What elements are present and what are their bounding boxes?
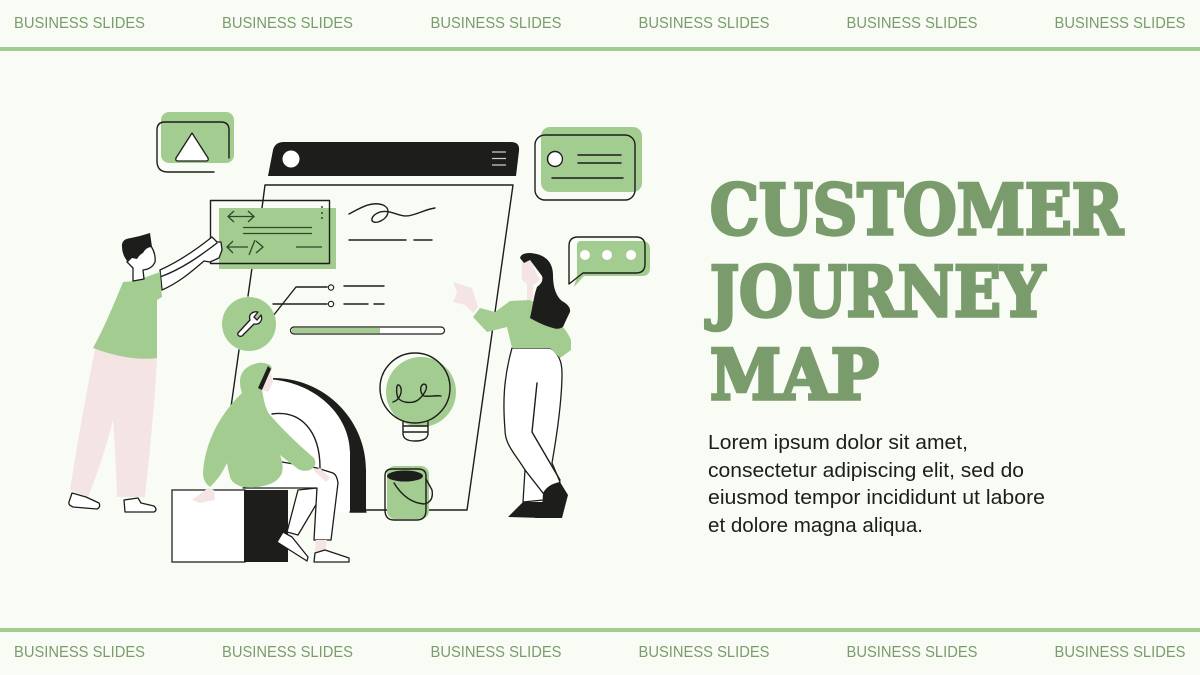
top header band: BUSINESS SLIDES bbox=[846, 15, 978, 32]
top header band: BUSINESS SLIDES bbox=[14, 15, 145, 32]
bottom footer band bbox=[0, 628, 1200, 661]
bottom footer band: BUSINESS SLIDES bbox=[1054, 644, 1186, 661]
character: pointing woman bbox=[453, 253, 571, 518]
icon: triangle card bbox=[157, 112, 234, 172]
title: JOURNEY bbox=[705, 252, 1046, 333]
bottom footer band: BUSINESS SLIDES bbox=[222, 644, 353, 661]
icon: light bulb bbox=[380, 353, 456, 441]
body text: et dolore magna aliqua. bbox=[708, 514, 923, 537]
top header band: BUSINESS SLIDES bbox=[430, 15, 562, 32]
bottom footer band: BUSINESS SLIDES bbox=[846, 644, 978, 661]
browser window panel bbox=[231, 142, 519, 510]
body text: Lorem ipsum dolor sit amet, bbox=[708, 431, 968, 454]
character: man with raised arms bbox=[69, 233, 222, 512]
icon: bucket bbox=[385, 466, 432, 520]
title: MAP bbox=[710, 335, 879, 416]
icon: code card bbox=[210, 200, 336, 269]
body text: consectetur adipiscing elit, sed do bbox=[708, 459, 1024, 482]
title: CUSTOMER bbox=[710, 170, 1124, 251]
icon: speech bubble bbox=[569, 237, 650, 287]
title bbox=[705, 170, 1124, 416]
bottom footer band: BUSINESS SLIDES bbox=[638, 644, 770, 661]
bottom footer band: BUSINESS SLIDES bbox=[14, 644, 145, 661]
icon: profile card bbox=[535, 127, 642, 200]
top header band: BUSINESS SLIDES bbox=[638, 15, 770, 32]
top header band: BUSINESS SLIDES bbox=[222, 15, 353, 32]
body text: eiusmod tempor incididunt ut labore bbox=[708, 486, 1045, 509]
top header band: BUSINESS SLIDES bbox=[1054, 15, 1186, 32]
body text bbox=[708, 431, 1045, 537]
illustration bbox=[69, 112, 650, 562]
top header band bbox=[0, 15, 1200, 51]
icon: wrench circle bbox=[222, 297, 276, 351]
character: seated person on block bbox=[172, 363, 366, 562]
bottom footer band: BUSINESS SLIDES bbox=[430, 644, 562, 661]
